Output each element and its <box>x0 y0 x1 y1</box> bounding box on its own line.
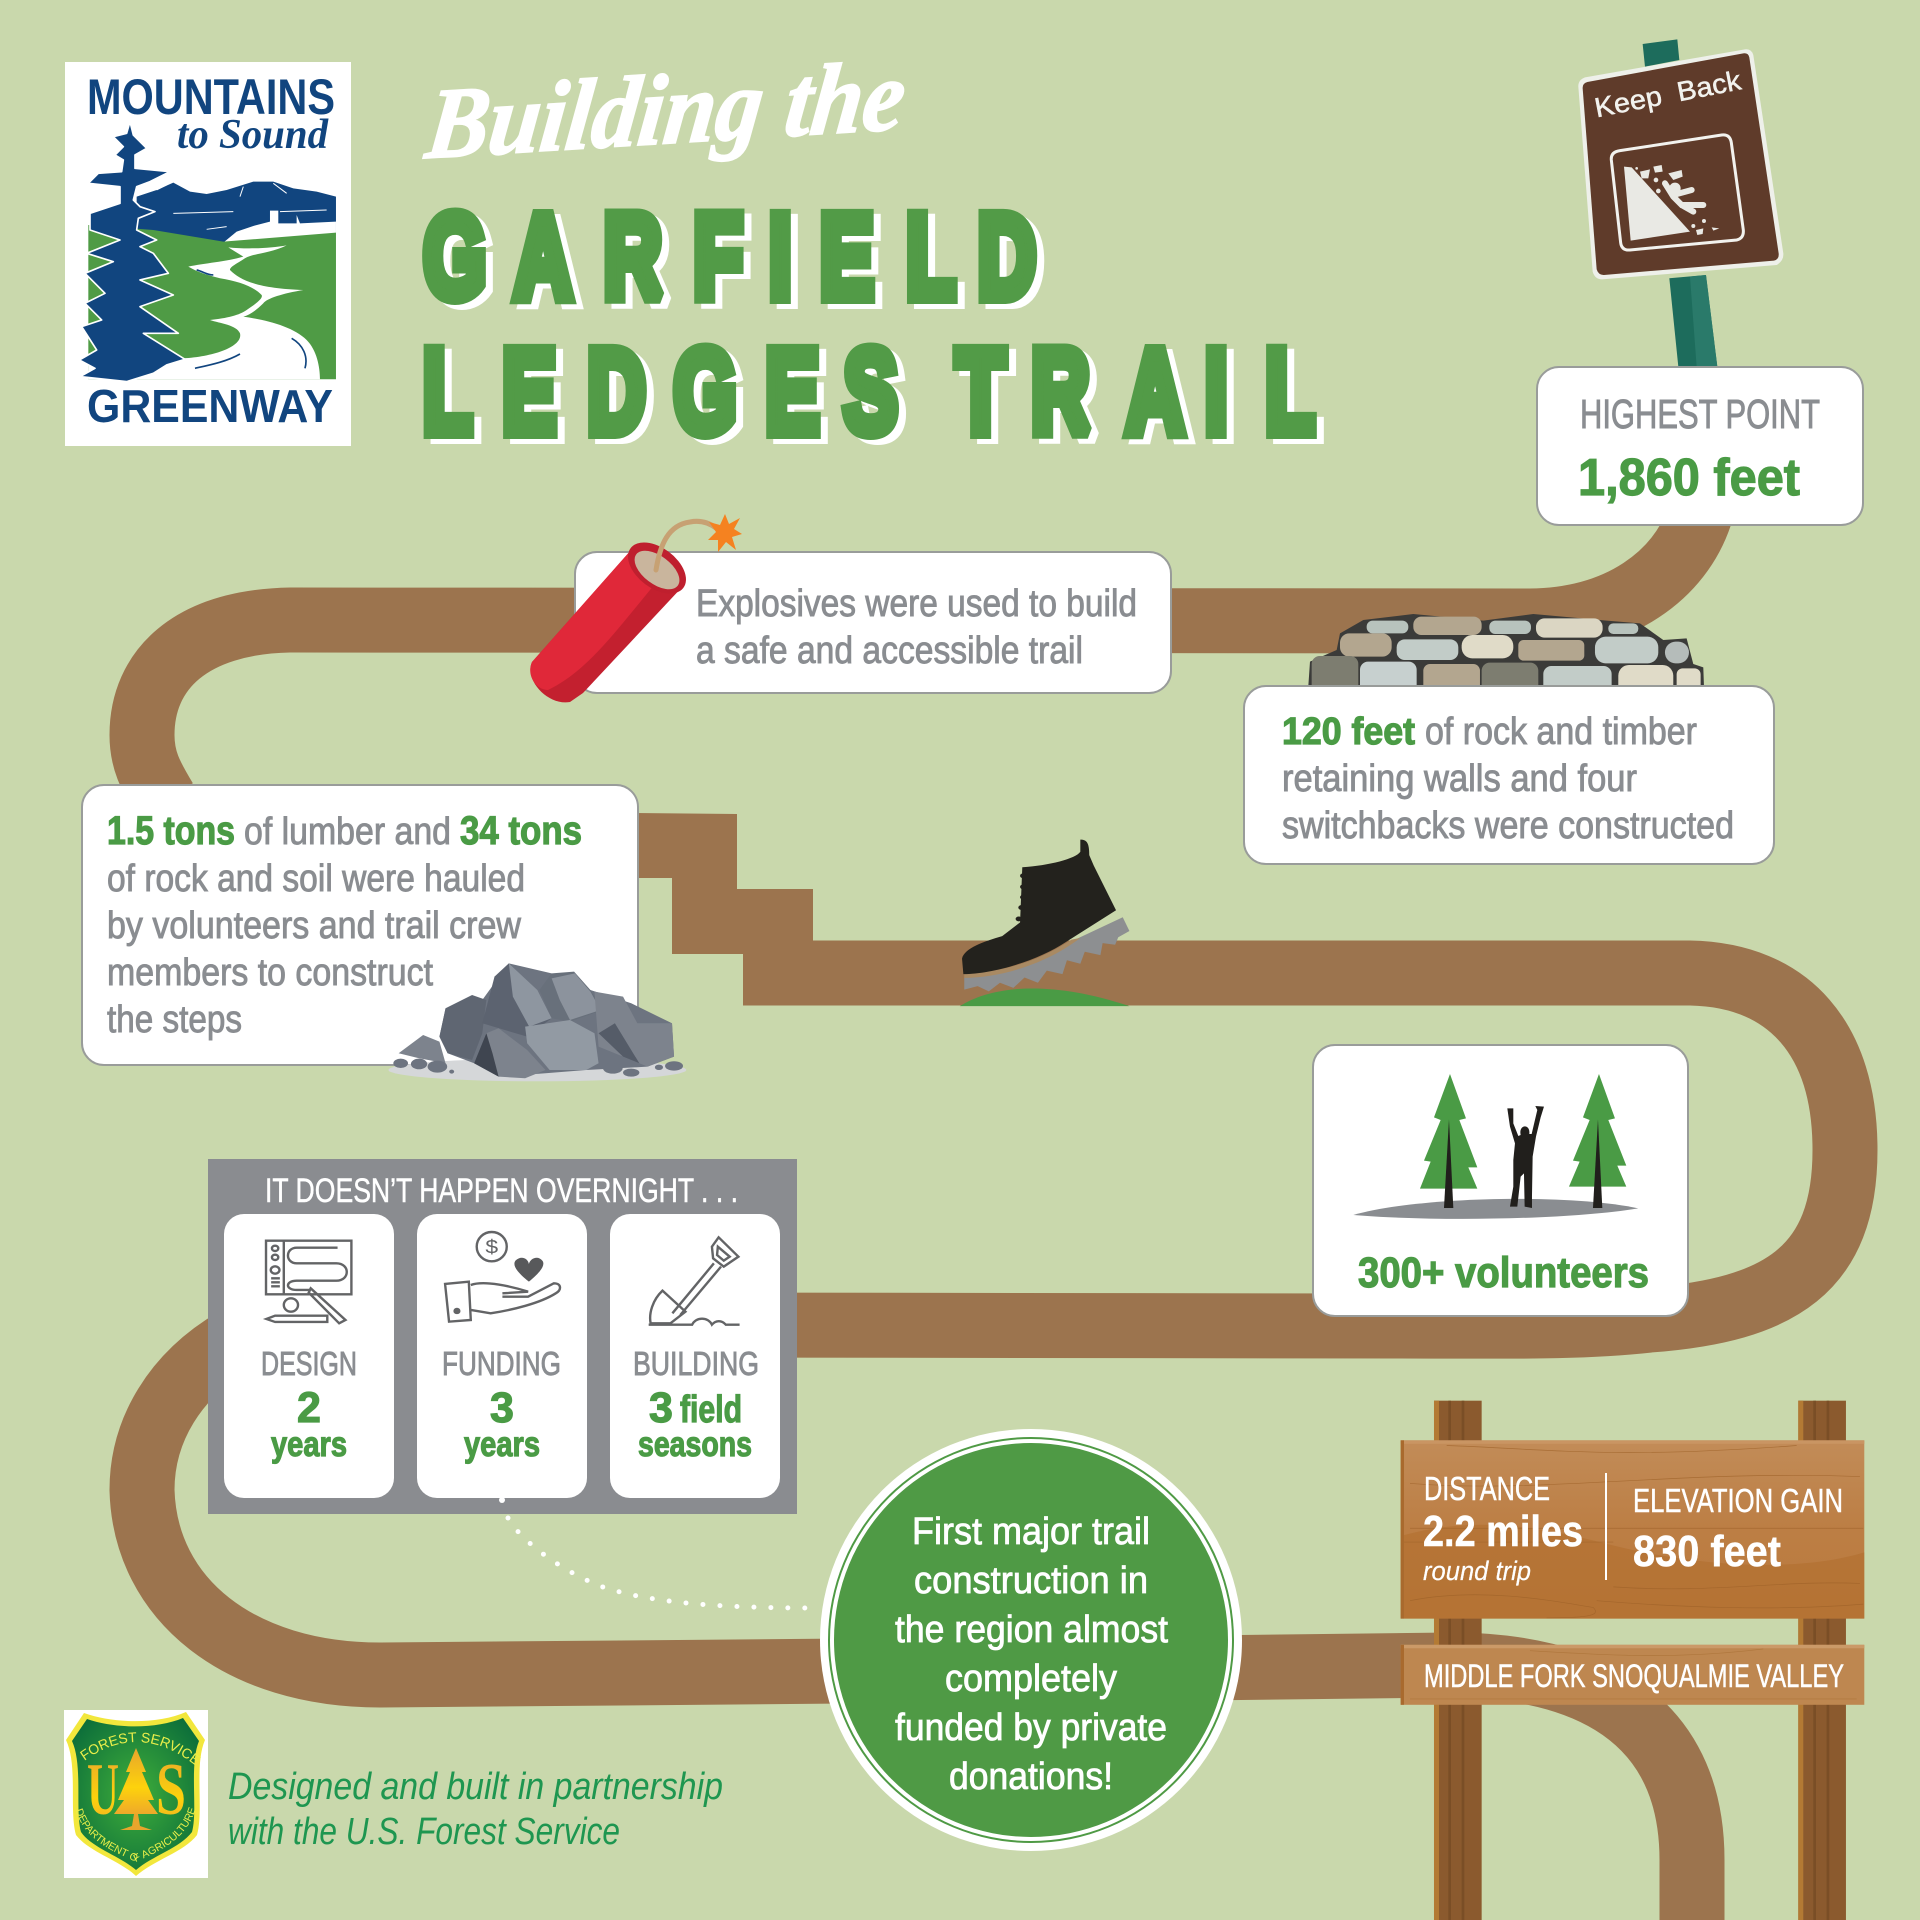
highlight: 1.5 tons: 1.5 tons <box>107 809 235 853</box>
title line: Garfield: GARFIELD <box>424 192 1036 323</box>
highlight: 34 tons: 34 tons <box>460 809 582 853</box>
text: retaining line two: retaining walls and four <box>1282 758 1637 800</box>
unit: field: field <box>680 1389 742 1431</box>
panel: highest point <box>1537 367 1863 525</box>
text: of lumber and: of lumber and <box>244 811 451 853</box>
text: explosives line one: Explosives were used to build <box>696 583 1137 625</box>
illustration: trees and volunteer <box>1353 1074 1638 1219</box>
value: 2.2 miles: 2.2 miles <box>1423 1507 1583 1556</box>
title line: Building the: Building the <box>421 39 911 180</box>
value: 300+ volunteers: 300+ volunteers <box>1358 1249 1649 1297</box>
icon: hand with dollar and heart <box>445 1232 560 1322</box>
icon: rock and timber wall <box>1308 614 1704 702</box>
trail path <box>142 515 1845 1920</box>
icon: rock pile <box>388 963 686 1081</box>
logo wordmark: Mountains: MOUNTAINS <box>87 69 335 125</box>
text: partnership credit: Designed and built in partnership <box>228 1766 723 1808</box>
sign board: valley <box>1401 1645 1864 1705</box>
dotted connector <box>508 1518 814 1608</box>
highlight: 120 feet: 120 feet <box>1282 711 1415 753</box>
text: explosives line two: a safe and accessible trail <box>696 630 1083 672</box>
icon: shovel <box>649 1237 740 1325</box>
card: building <box>610 1214 780 1498</box>
text: partnership credit <box>228 1766 723 1853</box>
callout: first major trail construction <box>820 1429 1242 1851</box>
icon: Keep Back sign: Keep Back <box>1592 64 1744 123</box>
panel: explosives <box>575 552 1171 693</box>
unit: years: years <box>271 1425 347 1464</box>
icon: green mound <box>960 988 1129 1006</box>
label: funding: FUNDING <box>442 1345 561 1382</box>
logo: U.S. Forest Service shield <box>64 1710 208 1878</box>
divider <box>1605 1473 1607 1580</box>
icon: design screen <box>266 1241 351 1323</box>
callout text: donations! <box>949 1756 1113 1798</box>
logo: U.S. Forest Service shield: DEPARTMENT OF AGRICULTURE <box>76 1807 196 1862</box>
card: design <box>224 1214 394 1498</box>
unit: seasons: seasons <box>638 1425 752 1464</box>
icon: hand with dollar and heart: $ <box>485 1237 498 1258</box>
title <box>421 39 1321 463</box>
label: elevation gain: ELEVATION GAIN <box>1633 1482 1843 1519</box>
panel: volunteers <box>1313 1045 1688 1316</box>
label: building: BUILDING <box>633 1345 759 1382</box>
note: round trip: round trip <box>1423 1556 1531 1586</box>
icon: hiking boot <box>960 840 1129 1006</box>
logo wordmark: to Sound: to Sound <box>177 112 329 158</box>
text: line two: of rock and soil were hauled <box>107 858 525 900</box>
sign posts <box>1434 1401 1846 1920</box>
callout text: First major trail <box>912 1511 1150 1553</box>
text: retaining line three: switchbacks were constructed <box>1282 805 1734 847</box>
callout text: the region almost <box>895 1609 1168 1651</box>
card: funding <box>417 1214 587 1498</box>
sign board: stats <box>1401 1440 1864 1619</box>
value: 2: 2 <box>297 1384 321 1432</box>
value: 3 field: 3 <box>649 1384 673 1432</box>
logo: U.S. Forest Service shield: S <box>156 1749 186 1831</box>
title line: Garfield shadow: GARFIELD <box>431 197 1043 328</box>
text: partnership credit: with the U.S. Forest Service <box>228 1811 620 1853</box>
text: line four: members to construct <box>107 952 433 994</box>
value: 830 feet: 830 feet <box>1633 1527 1781 1576</box>
callout text: funded by private <box>895 1707 1167 1749</box>
text: line five: the steps <box>107 999 242 1041</box>
logo: U.S. Forest Service shield: U <box>87 1749 119 1831</box>
text: retaining line one: of rock and timber <box>1425 711 1697 753</box>
panel: it doesn't happen overnight <box>208 1159 797 1514</box>
icon: Keep Back sign <box>1578 39 1783 367</box>
callout text <box>895 1511 1168 1798</box>
panel: lumber and rock hauled <box>82 785 638 1065</box>
label: highest point: HIGHEST POINT <box>1580 391 1820 437</box>
value: 3: 3 <box>490 1384 514 1432</box>
heading: IT DOESN’T HAPPEN OVERNIGHT . . . <box>265 1172 738 1210</box>
callout text: construction in <box>914 1560 1148 1602</box>
panel: retaining walls <box>1244 686 1774 864</box>
logo landscape illustration <box>79 122 336 382</box>
logo wordmark: Greenway: GREENWAY <box>87 380 333 432</box>
title line: Ledges Trail: LEDGES TRAIL <box>423 327 1314 458</box>
label: design: DESIGN <box>261 1345 357 1382</box>
text: line three: by volunteers and trail crew <box>107 905 521 947</box>
connector start dot <box>499 1497 505 1503</box>
label: distance: DISTANCE <box>1424 1470 1550 1507</box>
unit: years: years <box>464 1425 540 1464</box>
title line: Ledges Trail shadow: LEDGES TRAIL <box>430 332 1321 463</box>
logo: U.S. Forest Service shield: FOREST SERVICE <box>80 1732 201 1765</box>
icon: dynamite <box>530 514 742 702</box>
callout text: completely <box>945 1658 1117 1700</box>
icon: trailhead wooden sign <box>1401 1401 1864 1920</box>
logo: Mountains to Sound Greenway <box>65 62 351 446</box>
value: 1,860 feet: 1,860 feet <box>1578 449 1800 507</box>
